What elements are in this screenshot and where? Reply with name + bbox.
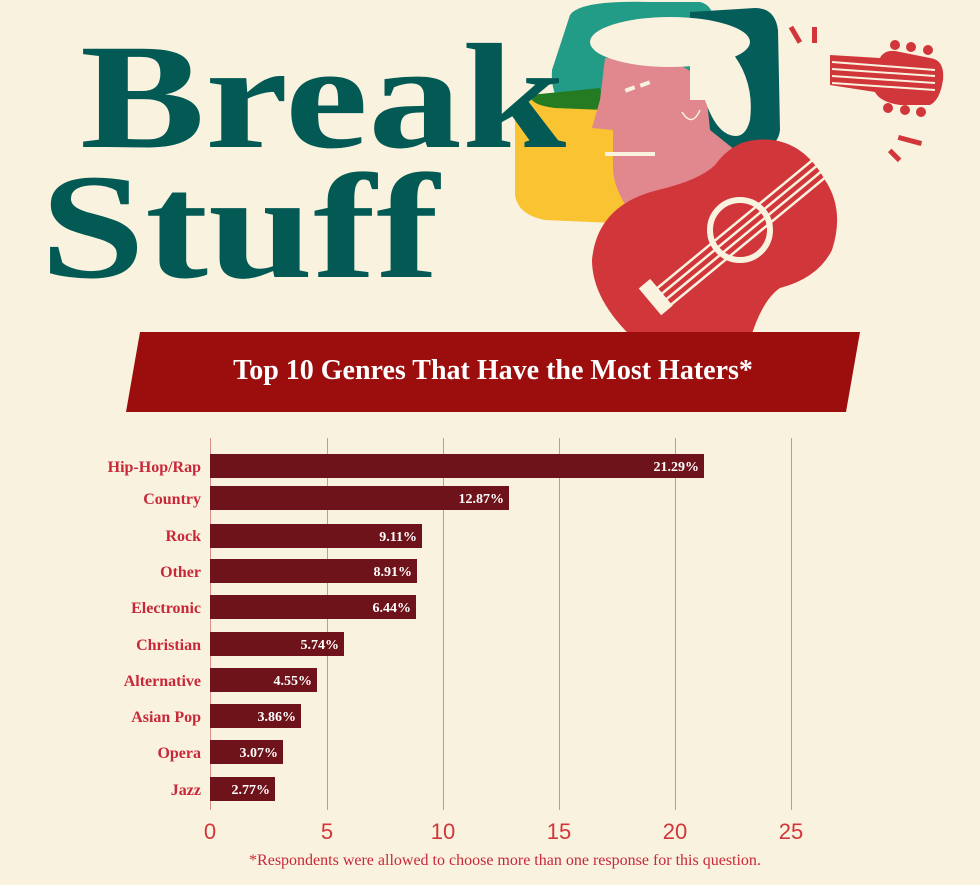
illustration: guitarist [515,2,944,332]
bar chart: Asian Pop [131,709,201,726]
banner [126,332,860,412]
footnote: *Respondents were allowed to choose more than one response for this question. [249,852,761,869]
bar chart: 9.11% [379,530,417,545]
bar chart: 3.07% [240,746,278,761]
bar chart: 5.74% [300,638,339,653]
bar chart: Electronic [131,600,201,617]
bar chart: Jazz [171,782,201,799]
bar chart: 20 [663,819,687,844]
title: Stuff: Stuff [40,144,439,310]
title: Break: Break [80,14,566,180]
bar chart: Opera [157,745,201,762]
bar chart: Hip-Hop/Rap [108,459,201,476]
bar chart [108,438,803,844]
bar chart: Rock [165,528,201,545]
bar chart: 21.29% [654,460,699,475]
bar chart: 4.55% [274,674,312,689]
bar chart: 25 [779,819,803,844]
banner: Top 10 Genres That Have the Most Haters* [233,355,753,386]
bar chart: 10 [431,819,455,844]
bar chart: Country [143,491,201,508]
bar chart: Alternative [124,673,201,690]
bar chart: 5 [321,819,333,844]
bar chart: Other [160,564,201,581]
bar chart: 6.44% [372,601,411,616]
bar chart: 8.91% [374,565,412,580]
bar chart: 12.87% [458,492,504,507]
bar chart: Christian [136,637,201,654]
bar chart: 0 [204,819,216,844]
bar chart: 3.86% [258,710,296,725]
bar chart: 2.77% [232,783,270,798]
bar chart: 15 [547,819,571,844]
